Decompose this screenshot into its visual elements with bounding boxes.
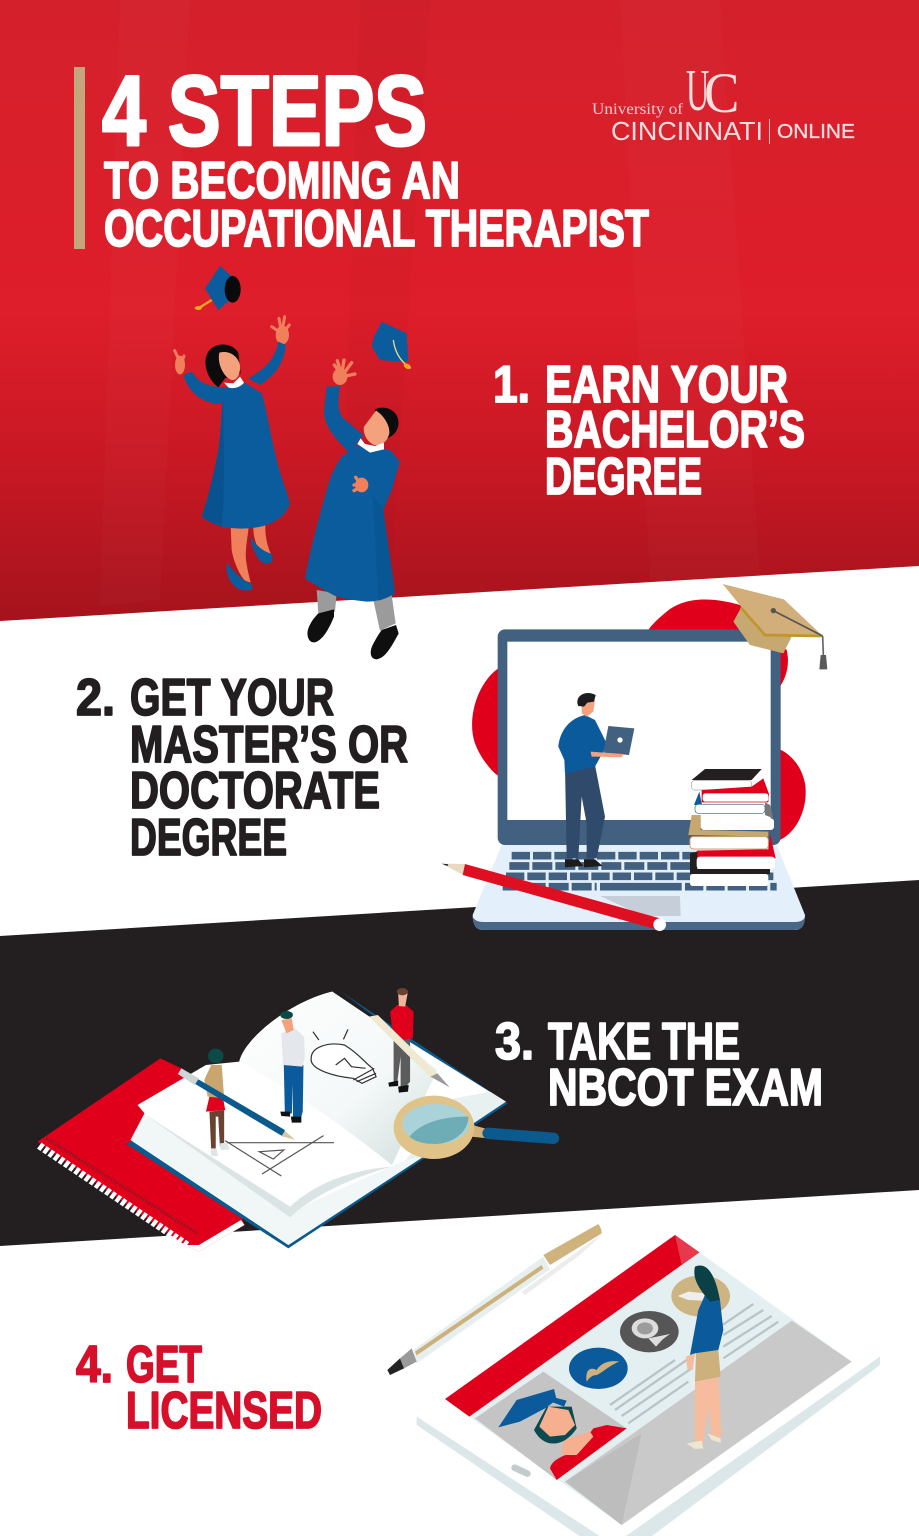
- title: 4 STEPS: [102, 55, 427, 166]
- step 2 heading: [76, 669, 408, 867]
- figure: man in red sweater with pen: [369, 988, 450, 1093]
- logo: University of Cincinnati Online: U: [686, 58, 709, 124]
- step 3 heading: NBCOT EXAM: [548, 1059, 823, 1117]
- drawing: light bulb: [311, 1029, 376, 1083]
- icon: pen: [387, 1224, 602, 1375]
- step 2 heading: MASTER’S OR: [130, 716, 408, 774]
- figure: male graduate: [305, 360, 400, 659]
- step 4 heading: GET: [126, 1336, 202, 1394]
- step 1 heading: [493, 356, 805, 506]
- figure: female graduate: [175, 317, 290, 591]
- accent bar: [74, 67, 85, 249]
- icon: red pencil: [442, 864, 666, 931]
- logo: University of Cincinnati Online: [592, 58, 855, 146]
- step 1 heading: BACHELOR’S: [545, 401, 805, 459]
- illustration: open book and notebook: [38, 988, 553, 1252]
- logo: University of Cincinnati Online: University of: [592, 101, 684, 118]
- icon: award circle: [620, 1311, 679, 1352]
- icon: red spiral notebook: [38, 1058, 245, 1252]
- tablet body: [417, 1223, 880, 1536]
- logo: University of Cincinnati Online: ONLINE: [777, 121, 855, 143]
- title: TO BECOMING AN: [104, 152, 460, 210]
- step 1 heading: DEGREE: [545, 448, 702, 506]
- logo: University of Cincinnati Online: CINCINNATI: [611, 116, 763, 146]
- step 3 heading: 3.: [495, 1013, 534, 1071]
- logo: University of Cincinnati Online: C: [704, 61, 739, 124]
- laptop base: [473, 845, 805, 930]
- step 4 heading: [76, 1336, 322, 1440]
- step 1 heading: EARN YOUR: [545, 356, 788, 414]
- red blob backdrop: [472, 600, 806, 840]
- step 3 heading: TAKE THE: [548, 1013, 740, 1071]
- step 2 heading: DEGREE: [130, 809, 287, 867]
- figure: man in white sweater: [280, 1011, 305, 1123]
- drawing: triangle ruler: [225, 1136, 334, 1176]
- icon: thrown cap left: [195, 266, 241, 310]
- step 2 heading: GET YOUR: [130, 669, 334, 727]
- icon: magnifying glass: [394, 1096, 553, 1159]
- step 2 heading: DOCTORATE: [130, 762, 380, 820]
- illustration: laptop with student and books: [442, 584, 827, 931]
- step 3 heading: [495, 1013, 823, 1117]
- icon: thrown cap right: [372, 322, 412, 370]
- keyboard: [503, 856, 777, 887]
- step 2 heading: 2.: [76, 669, 115, 727]
- title: OCCUPATIONAL THERAPIST: [104, 200, 649, 258]
- icon: open book: [125, 992, 508, 1248]
- icon: book circle: [569, 1348, 628, 1389]
- icon: gold graduation cap: [723, 584, 827, 669]
- step 1 heading: 1.: [493, 356, 530, 414]
- title: [102, 55, 649, 258]
- photo: graduate portrait: [475, 1372, 627, 1480]
- figure: student with laptop: [558, 693, 634, 867]
- tablet home button: [510, 1463, 532, 1478]
- panel: black step 3 band: [0, 880, 919, 1246]
- illustration: graduates jumping: [175, 266, 412, 659]
- icon: stack of books: [688, 769, 776, 886]
- illustration: tablet and pen: [387, 1223, 880, 1536]
- tablet screen: [469, 1252, 852, 1525]
- figure: woman with blue pencil: [178, 1049, 295, 1156]
- tablet header bar: [445, 1235, 699, 1417]
- step 4 heading: 4.: [76, 1336, 113, 1394]
- laptop screen: [498, 629, 781, 845]
- step 4 heading: LICENSED: [126, 1382, 322, 1440]
- panel: red header section: [0, 0, 919, 621]
- icon: pencil circle: [671, 1275, 730, 1317]
- figure: woman standing on tablet: [686, 1266, 723, 1449]
- text lines: [610, 1304, 778, 1423]
